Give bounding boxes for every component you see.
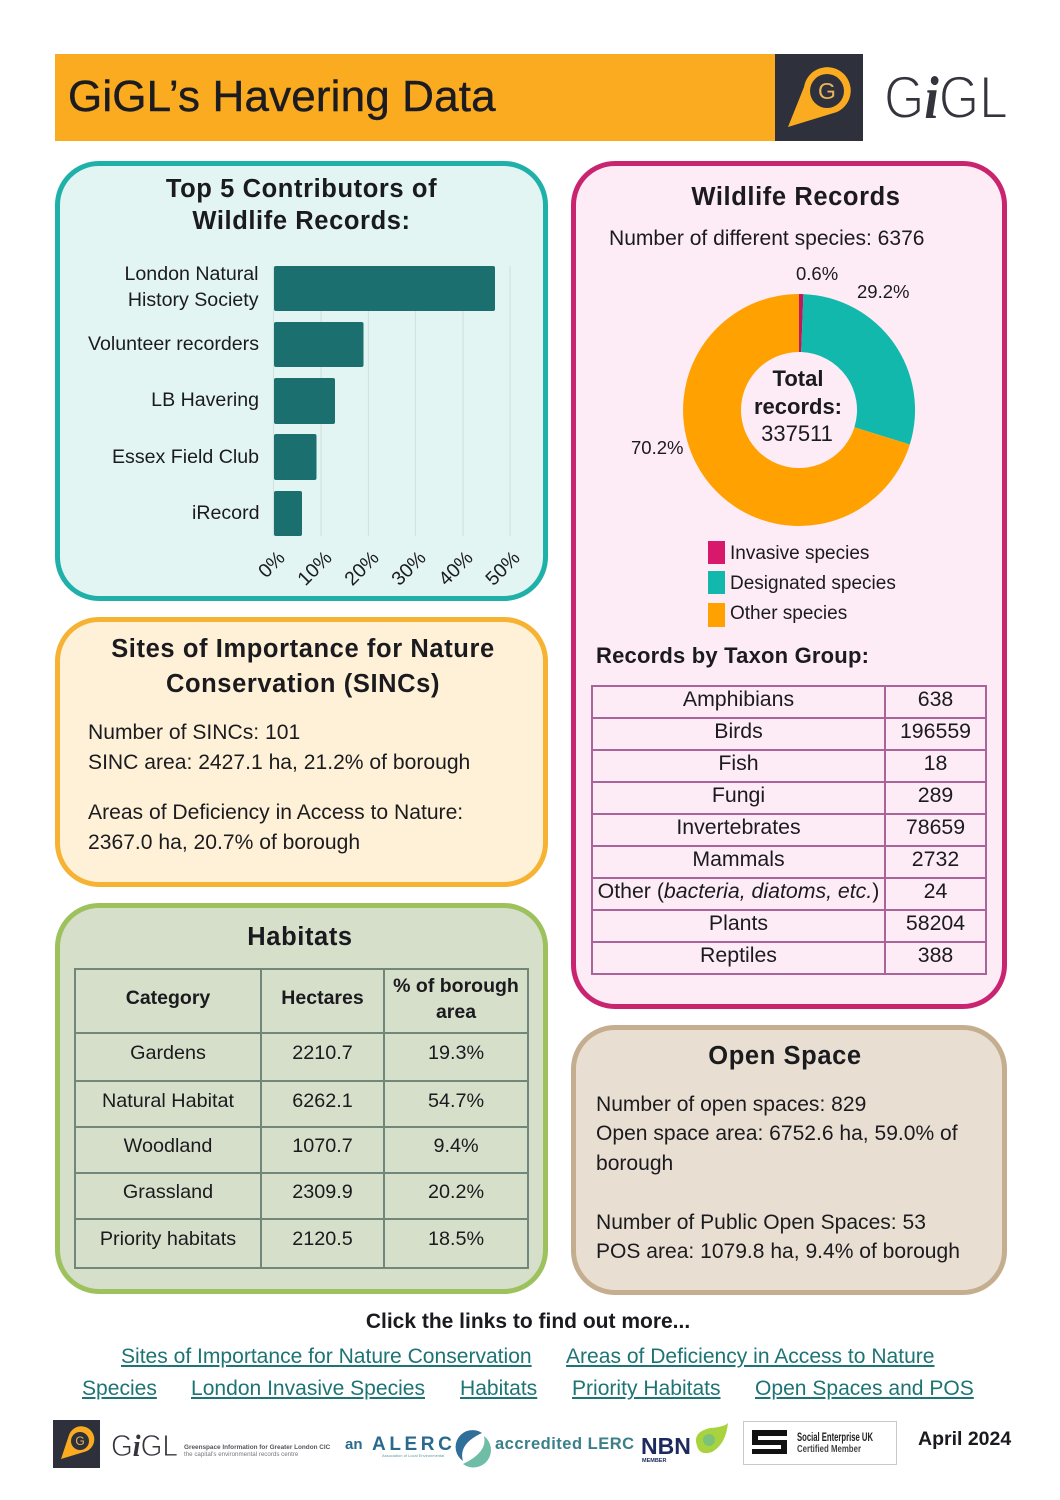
bar chart: contributors: LB Havering (151, 389, 259, 411)
logo: NBN member: NBN (641, 1433, 691, 1459)
links: Open Spaces and POS (755, 1377, 974, 1400)
icon: GiGL map pin logo: G (818, 78, 836, 104)
taxon group table: Fish (718, 751, 759, 775)
habitats table: 2210.7 (292, 1042, 353, 1064)
logo: ALERC accredited: an (345, 1436, 363, 1453)
heading: records by taxon group: Records by Taxon Group: (596, 643, 869, 668)
logo: GiGL with strapline (111, 1428, 331, 1463)
logo: GiGL with strapline: GiGL (111, 1428, 178, 1463)
taxon group table: Invertebrates (676, 815, 801, 839)
habitats table: 19.3% (428, 1042, 484, 1064)
links: Areas of Deficiency in Access to Nature (566, 1345, 934, 1368)
habitats table: 20.2% (428, 1181, 484, 1203)
habitats table: 6262.1 (292, 1090, 353, 1112)
donut chart: total records: records: (754, 394, 842, 419)
legend item: other (708, 603, 725, 627)
panel: wildlife records (571, 161, 1007, 1009)
panel: habitats (55, 903, 548, 1294)
logo: ALERC accredited: ALERC (372, 1434, 455, 1455)
header banner (55, 54, 775, 141)
icon: GiGL small logo: G (75, 1434, 85, 1448)
taxon group table: Birds (714, 719, 763, 743)
links heading: Click the links to find out more... (366, 1310, 690, 1333)
logo: Social Enterprise UK: Social Enterprise UK (797, 1432, 873, 1444)
bar chart: contributors: 30% (387, 547, 431, 590)
deficiency figures (88, 801, 463, 854)
donut chart: total records: 70.2% (631, 437, 683, 458)
logo: NBN member (641, 1423, 728, 1464)
donut chart: total records: 0.6% (796, 263, 838, 284)
bar chart: contributors: 20% (340, 547, 384, 590)
open space figures: Open space area: 6752.6 ha, 59.0% of (596, 1122, 958, 1145)
taxon group table: 289 (918, 783, 953, 807)
heading: wildlife records: Wildlife Records (691, 183, 901, 211)
donut chart: total records: 29.2% (857, 281, 909, 302)
legend: species types: Other species (730, 603, 847, 624)
links: Priority Habitats (572, 1377, 721, 1400)
icon: GiGL small logo (53, 1420, 100, 1468)
legend: species types: Designated species (730, 573, 896, 594)
taxon group table: 24 (924, 879, 947, 903)
bar chart: contributors: 0% (254, 547, 290, 582)
SINC figures: Number of SINCs: 101 (88, 721, 300, 744)
heading: SINCs: Conservation (SINCs) (166, 670, 440, 698)
habitats table: 2309.9 (292, 1181, 353, 1203)
footer logos (53, 1420, 897, 1468)
deficiency figures: 2367.0 ha, 20.7% of borough (88, 831, 360, 854)
habitats table: Grassland (123, 1181, 213, 1203)
logo: GiGL with strapline: Greenspace Information for Greater London CIC (184, 1444, 331, 1451)
legend: species types: Invasive species (730, 543, 869, 564)
panel: SINCs (55, 617, 548, 887)
logo: GiGL with strapline: the capital's environmental records centre (184, 1451, 299, 1458)
habitats table: area (436, 1000, 476, 1022)
heading: habitats: Habitats (247, 923, 353, 951)
legend item: invasive (708, 541, 725, 564)
habitats table: Hectares (281, 987, 364, 1009)
taxon group table: 2732 (912, 847, 959, 871)
SINC figures: SINC area: 2427.1 ha, 21.2% of borough (88, 751, 470, 774)
taxon group table (591, 685, 987, 975)
bar chart: contributors: Volunteer recorders (88, 333, 259, 355)
habitats table: Woodland (124, 1135, 212, 1157)
habitats table: 18.5% (428, 1228, 484, 1250)
panel: open space (571, 1025, 1007, 1295)
taxon group table: 196559 (900, 719, 971, 743)
open space figures: Number of Public Open Spaces: 53 (596, 1211, 926, 1234)
heading: open space: Open Space (708, 1042, 862, 1070)
taxon group table: 638 (918, 687, 953, 711)
habitats table: Gardens (130, 1042, 206, 1064)
logo: ALERC accredited (345, 1430, 635, 1467)
links: Sites of Importance for Nature Conservation (121, 1345, 532, 1368)
donut chart: total records: 337511 (761, 421, 833, 446)
bar chart: contributors: 50% (481, 547, 525, 590)
habitats table: 54.7% (428, 1090, 484, 1112)
habitats table: Category (126, 987, 210, 1009)
bar chart: contributors (88, 263, 525, 590)
bar chart: contributors: 10% (293, 547, 337, 590)
habitats table (74, 968, 529, 1269)
logo: NBN member: MEMBER (642, 1458, 666, 1464)
taxon group table: Amphibians (683, 687, 794, 711)
open space figures: borough (596, 1152, 673, 1175)
panel: top 5 contributors (55, 161, 548, 601)
links: Habitats (460, 1377, 537, 1400)
open space figures: Number of open spaces: 829 (596, 1093, 866, 1116)
taxon group table: Reptiles (700, 943, 777, 967)
open space figures: POS area: 1079.8 ha, 9.4% of borough (596, 1240, 960, 1263)
heading: SINCs (111, 635, 495, 698)
taxon group table: Mammals (692, 847, 785, 871)
heading: SINCs: Sites of Importance for Nature (111, 635, 495, 663)
taxon group table: Fungi (712, 783, 765, 807)
taxon group table: 388 (918, 943, 953, 967)
bar chart: contributors: iRecord (192, 502, 260, 524)
logo: Social Enterprise UK: Certified Member (797, 1443, 861, 1455)
habitats table: % of borough (393, 974, 519, 996)
open space figures (596, 1093, 960, 1263)
bar chart: contributors: 40% (434, 547, 478, 590)
species count: Number of different species: 6376 (609, 227, 924, 250)
donut chart: total records (631, 263, 916, 526)
SINC figures (88, 721, 470, 774)
logo: ALERC accredited: accredited LERC (495, 1435, 635, 1453)
taxon group table: Plants (709, 911, 768, 935)
legend item: designated (708, 571, 725, 594)
bar chart: contributors: London Natural (124, 263, 258, 285)
taxon group table: 78659 (906, 815, 965, 839)
title: GiGL’s Havering Data (68, 72, 496, 121)
taxon group table: Other (bacteria, diatoms, etc.) (598, 879, 879, 903)
links: London Invasive Species (191, 1377, 425, 1400)
habitats table: Priority habitats (100, 1228, 236, 1250)
deficiency figures: Areas of Deficiency in Access to Nature: (88, 801, 463, 824)
taxon group table: 58204 (906, 911, 965, 935)
donut chart: total records: Total (773, 366, 823, 391)
links: Species (82, 1377, 157, 1400)
logo: Social Enterprise UK (744, 1422, 896, 1464)
heading: top 5 contributors: Top 5 Contributors of (166, 175, 437, 203)
habitats table: 1070.7 (292, 1135, 353, 1157)
bar chart: contributors: Essex Field Club (112, 446, 259, 468)
icon: GiGL map pin logo (775, 54, 863, 141)
habitats table: 2120.5 (292, 1228, 353, 1250)
taxon group table: 18 (924, 751, 947, 775)
habitats table: Natural Habitat (102, 1090, 234, 1112)
heading: top 5 contributors (166, 175, 437, 235)
heading: top 5 contributors: Wildlife Records: (192, 207, 411, 235)
date: April 2024 (918, 1428, 1011, 1450)
legend: species types (708, 541, 896, 627)
links (82, 1345, 974, 1400)
habitats table: 9.4% (433, 1135, 479, 1157)
bar chart: contributors: History Society (128, 289, 259, 311)
logo: ALERC accredited: Association of Local Environmental (382, 1453, 444, 1458)
